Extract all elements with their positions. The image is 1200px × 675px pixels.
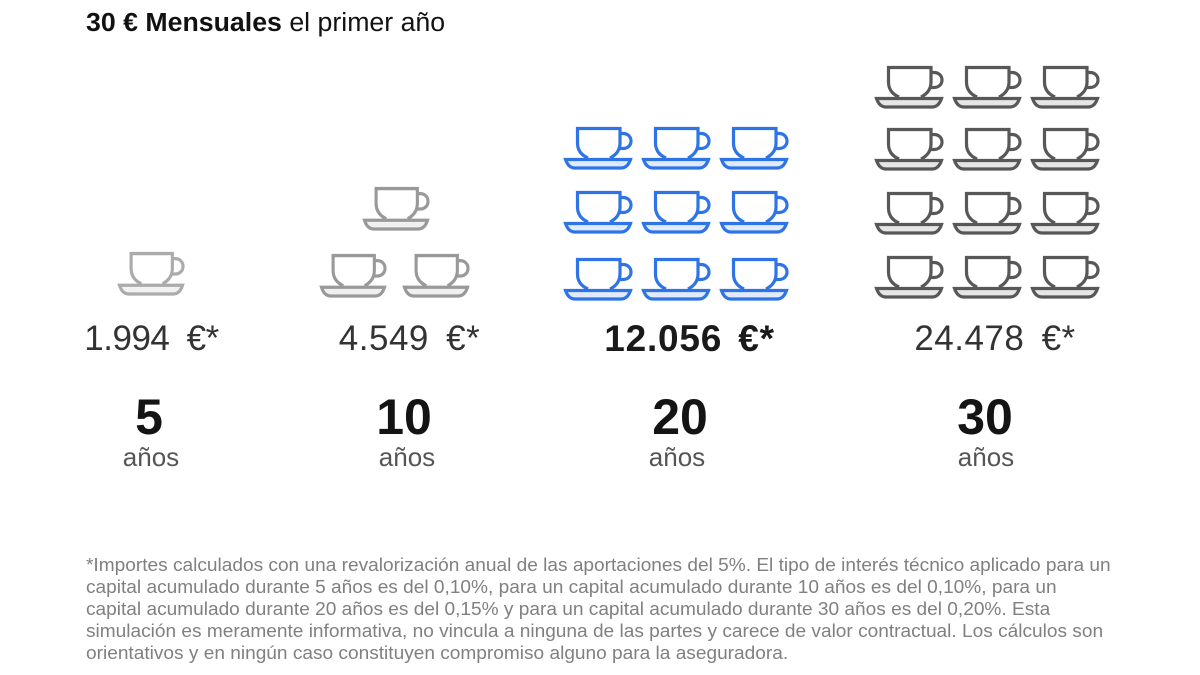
footnote: *Importes calculados con una revalorización anual de las aportaciones del 5%. El tipo de interés técnico aplicado para un	[86, 555, 1111, 575]
cups: 20 years	[566, 128, 787, 299]
cups: 10 years	[321, 189, 468, 296]
period: 5 years: 5	[135, 389, 163, 445]
footnote: capital acumulado durante 20 años es del 0,15% y para un capital acumulado durante 30 años es del 0,20%. Esta	[86, 599, 1050, 619]
unit: 30 years: años	[958, 442, 1014, 472]
value: 10 years: 4.549 €*	[339, 319, 480, 358]
footnote: orientativos y en ningún caso constituyen compromiso alguno para la aseguradora.	[86, 643, 788, 663]
period: 30 years: 30	[957, 389, 1013, 445]
cups: 30 years	[876, 68, 1098, 297]
footnote: capital acumulado durante 5 años es del 0,10%, para un capital acumulado durante 10 años es del 0,10%, para un	[86, 577, 1057, 597]
value: 20 years: 12.056 €*	[604, 318, 775, 359]
value: 5 years: 1.994 €*	[84, 319, 219, 358]
unit: 20 years: años	[649, 442, 705, 472]
title: 30 € Mensuales el primer año	[86, 9, 445, 37]
value: 30 years: 24.478 €*	[914, 319, 1076, 358]
period: 20 years: 20	[652, 389, 708, 445]
footnote: simulación es meramente informativa, no vincula a ninguna de las partes y carece de valor contractual. Los cálculos son	[86, 621, 1103, 641]
footnote	[86, 555, 1111, 663]
unit: 5 years: años	[123, 442, 179, 472]
cups: 5 years	[119, 254, 183, 294]
period: 10 years: 10	[376, 389, 432, 445]
unit: 10 years: años	[379, 442, 435, 472]
